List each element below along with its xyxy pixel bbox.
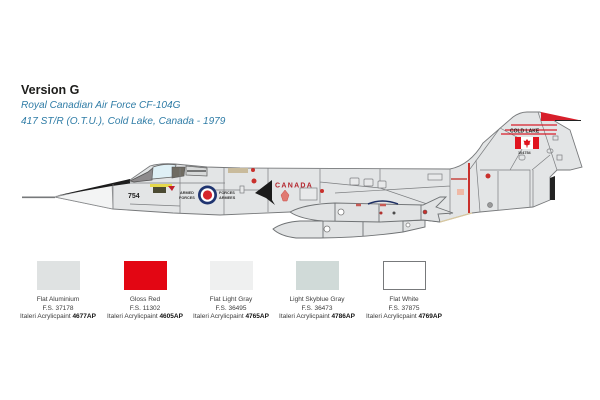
yellow marking by cockpit	[150, 184, 175, 193]
wing roundel arc	[368, 201, 398, 204]
anti-glare panel	[55, 179, 130, 196]
cockpit canopy	[130, 164, 207, 182]
label: Gloss Red: Gloss Red	[130, 296, 160, 303]
label: Gloss Red: F.S. 11302	[130, 305, 160, 312]
tail-plane tip	[541, 112, 581, 121]
label: Flat White: F.S. 37875	[388, 305, 420, 312]
label: Flat Light Gray: Flat Light Gray	[210, 296, 252, 303]
label: Light Skyblue Gray: F.S. 36473	[301, 305, 333, 312]
label: Flat Aluminium	[20, 296, 96, 320]
label: Flat Light Gray	[193, 296, 269, 320]
tail serial: 104754	[518, 151, 532, 155]
roundel: RCAF	[198, 186, 217, 204]
tail stripes with COLD LAKE: COLD LAKE	[510, 128, 540, 134]
fuselage text: Armed Forces: FORCES	[179, 196, 195, 200]
pitot probe	[22, 196, 55, 198]
tail flag: Canada	[515, 137, 539, 149]
subtitle: aircraft unit and location	[21, 100, 226, 126]
tail stripes with COLD LAKE	[501, 125, 557, 134]
label: Flat Light Gray: F.S. 36495	[215, 305, 247, 312]
red stencils	[451, 179, 467, 195]
red hazard markers	[251, 168, 490, 193]
fuselage text: Armed Forces: FORCES	[219, 191, 235, 195]
label: Flat Light Gray: Italeri Acrylicpaint 4765AP	[193, 313, 269, 320]
label: Flat White	[366, 296, 442, 320]
subtitle: aircraft unit and location: 417 ST/R (O.T.U.), Cold Lake, Canada - 1979	[21, 116, 225, 126]
swatch: Flat White	[383, 261, 426, 290]
panel lines	[113, 112, 557, 215]
heading: Version G: Version G	[21, 83, 79, 97]
label: Gloss Red	[107, 296, 183, 320]
label: Flat White: Flat White	[389, 296, 419, 303]
number 754: 754	[128, 193, 140, 200]
swatch: Gloss Red	[124, 261, 167, 290]
red emblem	[281, 190, 289, 201]
fuselage text: Armed Forces	[179, 191, 236, 200]
tan panel	[228, 168, 248, 173]
tan ventral fin	[440, 213, 472, 222]
swatch: Flat Light Gray	[210, 261, 253, 290]
label: Flat Aluminium: Flat Aluminium	[37, 296, 79, 303]
label: Gloss Red: Italeri Acrylicpaint 4605AP	[107, 313, 183, 320]
exhaust nozzle	[550, 176, 555, 200]
label: Flat Aluminium: F.S. 37178	[42, 305, 74, 312]
label: Light Skyblue Gray: Italeri Acrylicpaint 4786AP	[279, 313, 355, 320]
label: Light Skyblue Gray: Light Skyblue Gray	[290, 296, 344, 303]
label: Flat Aluminium: Italeri Acrylicpaint 4677AP	[20, 313, 96, 320]
small access panels	[240, 174, 442, 200]
swatch: Flat Aluminium	[37, 261, 80, 290]
nose cone	[55, 184, 113, 209]
swatch: Light Skyblue Gray	[296, 261, 339, 290]
fuselage	[55, 112, 582, 222]
label: Flat White: Italeri Acrylicpaint 4769AP	[366, 313, 442, 320]
rudder panels	[488, 136, 562, 208]
air intake	[255, 180, 275, 205]
subtitle: aircraft unit and location: Royal Canadian Air Force CF-104G	[21, 100, 181, 111]
label: Light Skyblue Gray	[279, 296, 355, 320]
upper tank and wing	[290, 197, 453, 222]
fuselage text: Armed Forces: ARMED	[180, 191, 194, 195]
lower fuel tank	[273, 220, 425, 238]
red fuselage band	[468, 163, 470, 213]
fuselage text: Armed Forces: ARMEES	[219, 196, 236, 200]
fuselage text: CANADA: CANADA	[275, 182, 313, 190]
